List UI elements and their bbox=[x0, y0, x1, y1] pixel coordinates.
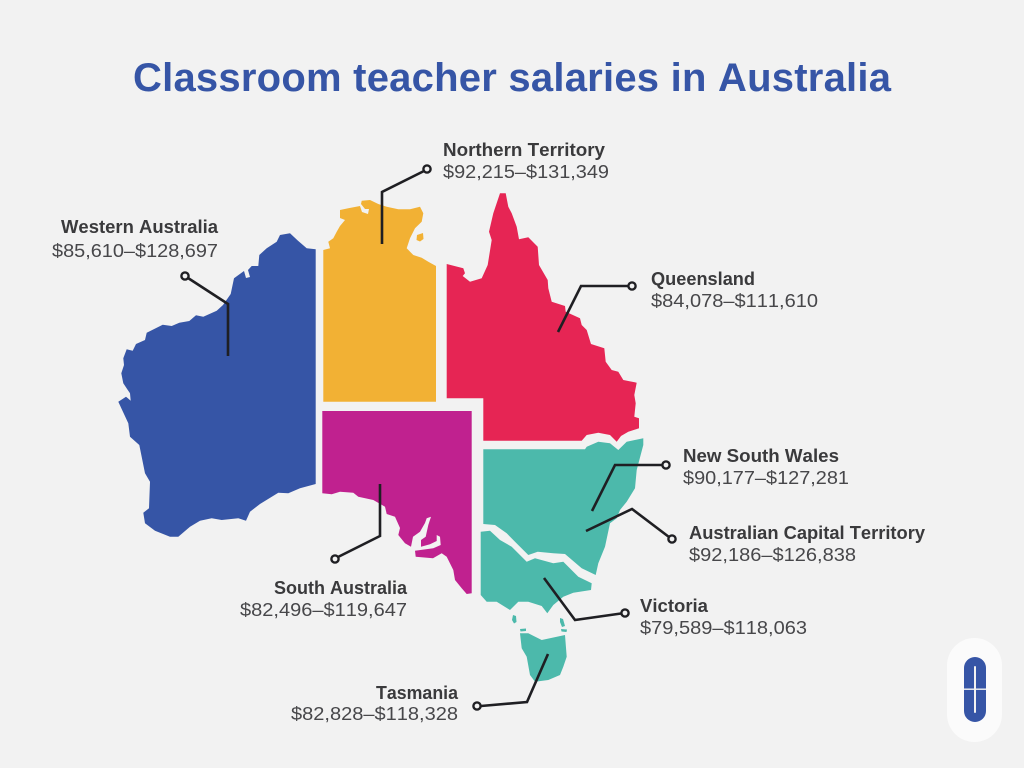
callout: Northern Territory: $92,215–$131,349 bbox=[443, 162, 609, 182]
callout: Western Australia: $85,610–$128,697 bbox=[52, 241, 218, 261]
callout: Australian Capital Territory bbox=[586, 509, 925, 565]
region: Northern Territory bbox=[323, 200, 436, 402]
region: Queensland bbox=[447, 193, 639, 442]
callout: New South Wales: $90,177–$127,281 bbox=[683, 468, 849, 488]
callout: Victoria: $79,589–$118,063 bbox=[640, 618, 807, 638]
callout: Queensland: $84,078–$111,610 bbox=[651, 291, 818, 311]
title: Classroom teacher salaries in Australia bbox=[133, 56, 892, 100]
callout: Australian Capital Territory: $92,186–$126,838 bbox=[689, 545, 856, 565]
callout: Northern Territory: Northern Territory bbox=[443, 140, 605, 160]
callout: Tasmania: $82,828–$118,328 bbox=[291, 704, 458, 724]
region: Victoria bbox=[481, 531, 592, 613]
callout: Western Australia bbox=[52, 217, 228, 356]
region: Western Australia bbox=[118, 233, 316, 537]
map of Australia bbox=[118, 193, 643, 682]
region: New South Wales bbox=[483, 438, 643, 575]
callout: South Australia: South Australia bbox=[274, 578, 408, 598]
callout: South Australia: $82,496–$119,647 bbox=[240, 600, 407, 620]
callout: Australian Capital Territory: Australian Capital Territory bbox=[689, 523, 925, 543]
region: Tasmania and Bass Strait islands bbox=[512, 615, 567, 682]
callout: Western Australia: Western Australia bbox=[61, 217, 219, 237]
region: South Australia bbox=[322, 411, 472, 594]
callout: Queensland: Queensland bbox=[651, 269, 755, 289]
callout: Tasmania bbox=[291, 654, 548, 724]
callout: New South Wales bbox=[592, 446, 849, 511]
callout: Northern Territory bbox=[382, 140, 609, 244]
callout: Tasmania: Tasmania bbox=[376, 683, 459, 703]
callout: Victoria: Victoria bbox=[640, 596, 709, 616]
logo badge bbox=[947, 638, 1002, 742]
callout: South Australia bbox=[240, 484, 408, 620]
callout: Queensland bbox=[558, 269, 818, 332]
callout: Victoria bbox=[544, 578, 807, 638]
callout: New South Wales: New South Wales bbox=[683, 446, 839, 466]
